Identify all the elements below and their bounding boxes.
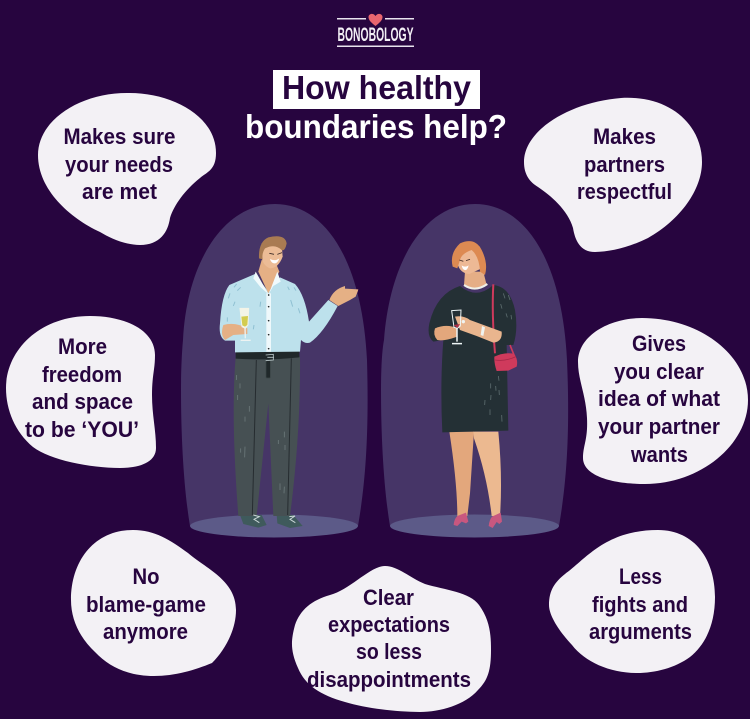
callout: gives you clear idea: you clear bbox=[614, 359, 704, 384]
title: boundaries help? bbox=[245, 108, 507, 145]
callout: less fights and arguments: arguments bbox=[589, 619, 692, 644]
callout: makes sure your needs are met: Makes sure bbox=[64, 124, 176, 149]
callout: more freedom and space bbox=[6, 316, 156, 468]
panel: woman under dome bbox=[381, 204, 568, 538]
callout: makes partners respectful: Makes bbox=[593, 124, 656, 149]
callout: less fights and arguments: Less bbox=[619, 564, 662, 589]
callout: clear expectations: Clear bbox=[363, 585, 414, 610]
callout: makes sure your needs are met: are met bbox=[82, 179, 158, 204]
callout: gives you clear idea: Gives bbox=[632, 331, 686, 356]
callout: clear expectations: disappointments bbox=[307, 667, 471, 692]
callout: no blame-game anymore: blame-game bbox=[86, 592, 206, 617]
callout: no blame-game anymore bbox=[71, 530, 236, 676]
title bbox=[245, 69, 507, 145]
callout: gives you clear idea: your partner bbox=[598, 414, 720, 439]
callout: more freedom and space: freedom bbox=[42, 362, 122, 387]
callout: more freedom and space: and space bbox=[32, 389, 133, 414]
callout: clear expectations: expectations bbox=[328, 612, 450, 637]
callout: more freedom and space: More bbox=[58, 334, 107, 359]
callout: less fights and arguments bbox=[549, 530, 715, 673]
illustration: woman with glass and bag bbox=[429, 241, 517, 528]
callout: more freedom and space: to be ‘YOU’ bbox=[25, 417, 139, 442]
callout: makes sure your needs are met bbox=[38, 93, 216, 245]
logo: Bonobology: BONOBOLOGY bbox=[338, 25, 414, 46]
title: How healthy bbox=[282, 69, 472, 106]
panel: man under dome bbox=[181, 204, 368, 538]
callout: gives you clear idea bbox=[578, 318, 748, 484]
callout: clear expectations bbox=[292, 566, 491, 712]
callout: less fights and arguments: fights and bbox=[592, 592, 688, 617]
callout: makes partners respectful: partners bbox=[584, 152, 665, 177]
callout: makes partners respectful bbox=[524, 98, 702, 252]
callout: no blame-game anymore: anymore bbox=[103, 619, 188, 644]
callout: makes sure your needs are met: your needs bbox=[65, 152, 173, 177]
illustration: man with glass bbox=[220, 236, 358, 528]
callout: gives you clear idea: idea of what bbox=[598, 386, 721, 411]
callout: makes partners respectful: respectful bbox=[577, 179, 672, 204]
logo: Bonobology bbox=[337, 14, 414, 47]
callout: gives you clear idea: wants bbox=[630, 442, 688, 467]
callout: clear expectations: so less bbox=[356, 639, 422, 664]
callout: no blame-game anymore: No bbox=[132, 564, 160, 589]
